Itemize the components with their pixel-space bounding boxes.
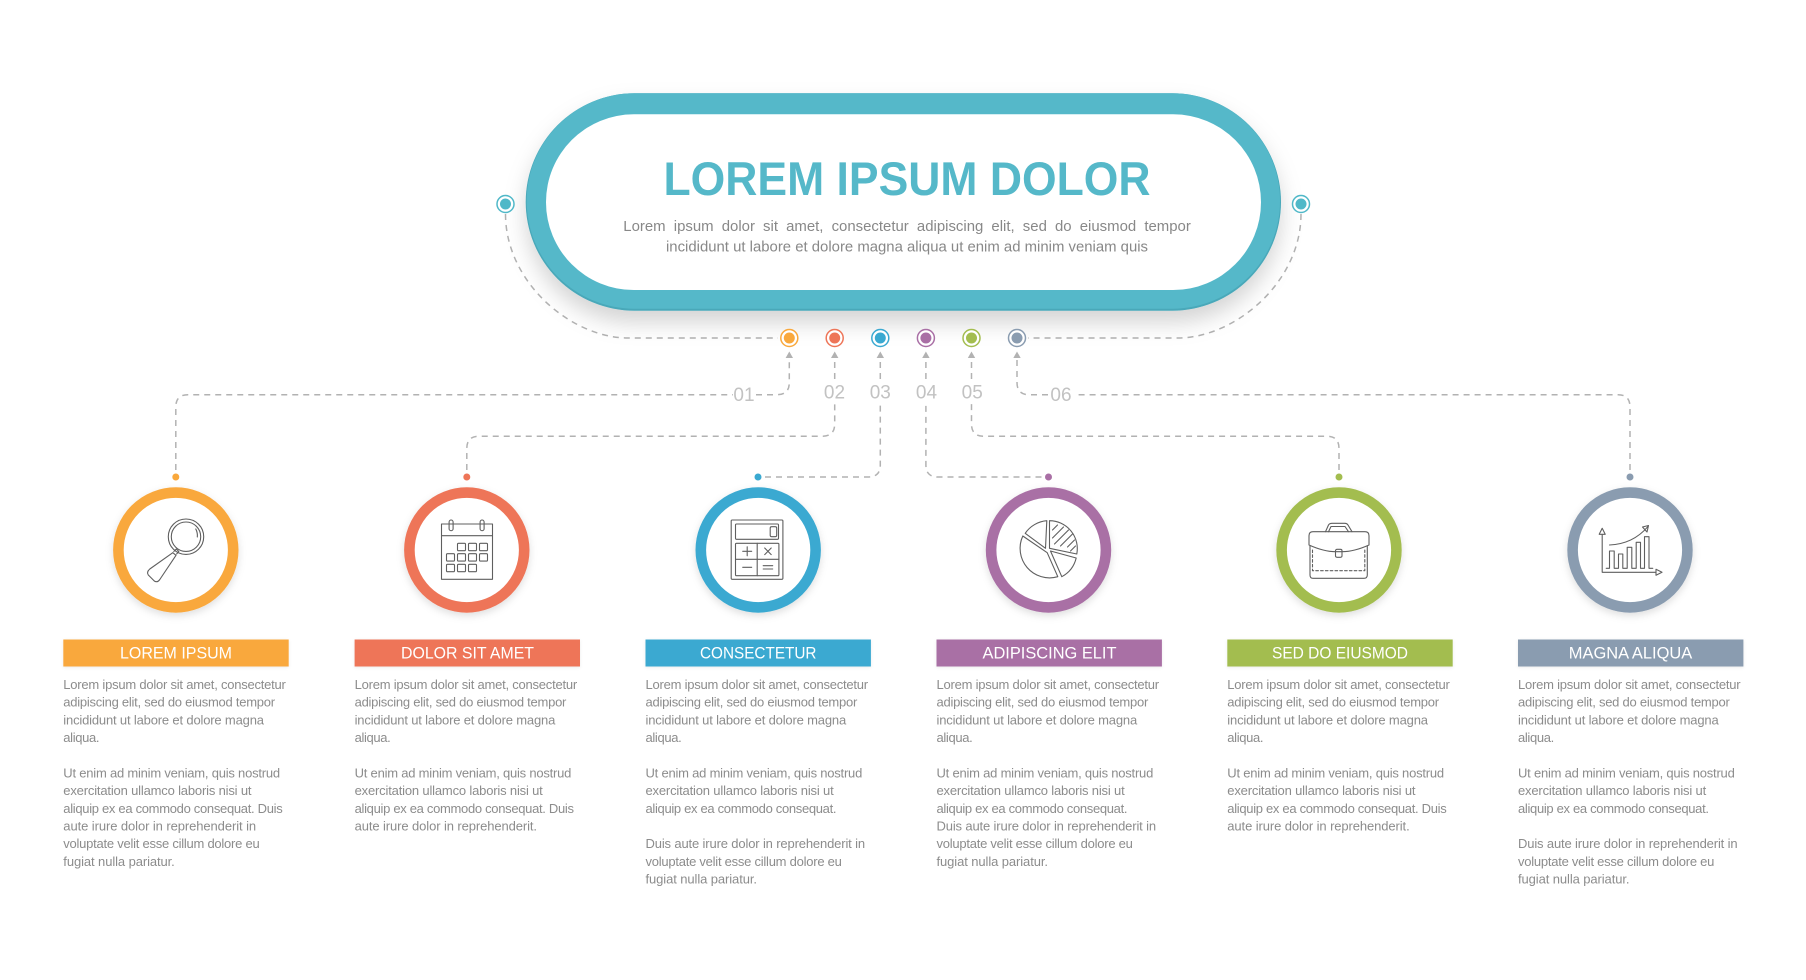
icon: calendar [442, 520, 492, 579]
number 02: 02 [824, 383, 845, 404]
body text 5: incididunt ut labore et dolore magna [1227, 712, 1429, 727]
header subtitle: Lorem ipsum dolor sit amet, consectetur adipiscing elit, sed do eiusmod tempor [623, 218, 1191, 235]
body text 1: fugiat nulla pariatur. [63, 854, 175, 869]
body text 2: aute irure dolor in reprehenderit. [355, 818, 537, 834]
number 06: 06 [1050, 385, 1072, 406]
panel: step 3 [646, 493, 871, 886]
body text 6: fugiat nulla pariatur. [1518, 871, 1630, 886]
body text 4: incididunt ut labore et dolore magna [936, 712, 1138, 727]
panel: step 6 [1518, 493, 1743, 886]
body text 1: Lorem ipsum dolor sit amet, consectetur [63, 677, 287, 692]
title bar 4: ADIPISCING ELIT [982, 644, 1116, 663]
body text 2: Lorem ipsum dolor sit amet, consectetur [355, 677, 578, 692]
body text 5: exercitation ullamco laboris nisi ut [1227, 783, 1416, 798]
body text 6: exercitation ullamco laboris nisi ut [1518, 783, 1707, 798]
body text 1: voluptate velit esse cillum dolore eu [63, 836, 260, 851]
number 05: 05 [962, 383, 983, 404]
body text 4: exercitation ullamco laboris nisi ut [936, 783, 1125, 798]
body text 5: aute irure dolor in reprehenderit. [1227, 818, 1410, 834]
body text 6: Lorem ipsum dolor sit amet, consectetur [1518, 677, 1741, 692]
header title: LOREM IPSUM DOLOR [664, 152, 1150, 205]
body text 1: aliqua. [63, 730, 100, 745]
body text 1: Ut enim ad minim veniam, quis nostrud [63, 766, 280, 780]
body text 3: voluptate velit esse cillum dolore eu [646, 854, 842, 869]
node dot 05 [963, 330, 980, 346]
title bar 3: CONSECTETUR [700, 644, 817, 663]
body text 3: Lorem ipsum dolor sit amet, consectetur [646, 677, 869, 692]
body text 2: aliquip ex ea commodo consequat. Duis [355, 801, 574, 816]
body text 3: aliqua. [646, 730, 682, 745]
connector 06 [1013, 352, 1634, 480]
body text 5: adipiscing elit, sed do eiusmod tempor [1227, 695, 1440, 710]
title bar 5 [1227, 640, 1453, 666]
body text 2: aliqua. [355, 730, 391, 745]
header left dot [497, 196, 514, 212]
title bar 4 [936, 640, 1162, 666]
panel: step 2 [355, 493, 580, 834]
body text 4: voluptate velit esse cillum dolore eu [936, 836, 1133, 851]
body text 3: Duis aute irure dolor in reprehenderit in [646, 836, 865, 851]
node dot 01 [781, 330, 798, 346]
icon: briefcase [1309, 523, 1369, 578]
icon: pie chart [1020, 521, 1077, 578]
body text 6: aliquip ex ea commodo consequat. [1518, 801, 1709, 816]
connector 05 [962, 352, 1342, 480]
ring 6 [1573, 493, 1687, 607]
icon: growth chart [1599, 526, 1662, 575]
connector 02 [463, 352, 845, 480]
body text 6: adipiscing elit, sed do eiusmod tempor [1518, 695, 1730, 710]
connector 04 [916, 352, 1052, 480]
ring 2 [409, 493, 524, 607]
body text 5: Lorem ipsum dolor sit amet, consectetur [1227, 677, 1451, 692]
body text 1: aliquip ex ea commodo consequat. Duis [63, 801, 283, 816]
title bar 1 [63, 640, 289, 666]
title bar 1: LOREM IPSUM [120, 644, 232, 663]
body text 1: incididunt ut labore et dolore magna [63, 712, 265, 727]
node dot 03 [872, 330, 889, 346]
body text 5: Ut enim ad minim veniam, quis nostrud [1227, 766, 1444, 780]
connector 03 [754, 352, 891, 480]
body text 6: aliqua. [1518, 730, 1554, 745]
connector: right arc from header to last dot [1028, 214, 1301, 338]
header pill [526, 93, 1281, 311]
title bar 2 [355, 640, 580, 666]
title bar 6: MAGNA ALIQUA [1569, 644, 1693, 663]
body text 5: aliquip ex ea commodo consequat. Duis [1227, 801, 1447, 816]
panel: step 1 [63, 493, 289, 869]
body text 4: aliqua. [936, 730, 973, 745]
number 04: 04 [916, 383, 937, 404]
body text 4: aliquip ex ea commodo consequat. [936, 801, 1128, 816]
body text 2: Ut enim ad minim veniam, quis nostrud [355, 766, 571, 780]
title bar 6 [1518, 640, 1743, 666]
node dot 04 [917, 330, 934, 346]
node dot 02 [826, 330, 843, 346]
body text 3: aliquip ex ea commodo consequat. [646, 801, 836, 816]
body text 4 [936, 677, 1160, 869]
body text 1: aute irure dolor in reprehenderit in [63, 818, 256, 834]
body text 2 [355, 677, 578, 834]
number 01: 01 [733, 385, 755, 406]
body text 1: exercitation ullamco laboris nisi ut [63, 783, 252, 798]
body text 4: Duis aute irure dolor in reprehenderit in [936, 818, 1156, 834]
body text 2: adipiscing elit, sed do eiusmod tempor [355, 695, 567, 710]
body text 4: Ut enim ad minim veniam, quis nostrud [936, 766, 1153, 780]
title bar 5: SED DO EIUSMOD [1272, 644, 1408, 663]
body text 5: aliqua. [1227, 730, 1264, 745]
body text 6: Ut enim ad minim veniam, quis nostrud [1518, 766, 1735, 780]
panel: step 4 [936, 493, 1162, 869]
body text 1: adipiscing elit, sed do eiusmod tempor [63, 695, 276, 710]
title bar 2: DOLOR SIT AMET [401, 644, 534, 663]
body text 6: Duis aute irure dolor in reprehenderit in [1518, 836, 1738, 851]
body text 6 [1518, 677, 1741, 886]
connector: left arc from header to first dot [506, 214, 778, 338]
node dot 06 [1008, 330, 1026, 346]
ring 4 [991, 493, 1106, 607]
header right dot [1292, 196, 1310, 212]
body text 6: voluptate velit esse cillum dolore eu [1518, 854, 1714, 869]
body text 6: incididunt ut labore et dolore magna [1518, 712, 1719, 727]
panel: step 5 [1227, 493, 1453, 834]
ring 1 [118, 493, 233, 607]
header subtitle: incididunt ut labore et dolore magna aliqua ut enim ad minim veniam quis [666, 239, 1148, 256]
body text 2: incididunt ut labore et dolore magna [355, 712, 556, 727]
body text 4: adipiscing elit, sed do eiusmod tempor [936, 695, 1149, 710]
body text 4: fugiat nulla pariatur. [936, 854, 1048, 869]
body text 3 [646, 677, 869, 886]
body text 2: exercitation ullamco laboris nisi ut [355, 783, 543, 798]
connector 01 [172, 352, 793, 480]
body text 5 [1227, 677, 1451, 834]
body text 3: adipiscing elit, sed do eiusmod tempor [646, 695, 858, 710]
title bar 3 [646, 640, 871, 666]
header subtitle [623, 218, 1191, 256]
icon: calculator [731, 520, 783, 579]
body text 3: exercitation ullamco laboris nisi ut [646, 783, 834, 798]
icon: magnifier [148, 519, 204, 582]
body text 3: incididunt ut labore et dolore magna [646, 712, 847, 727]
body text 3: Ut enim ad minim veniam, quis nostrud [646, 766, 862, 780]
body text 4: Lorem ipsum dolor sit amet, consectetur [936, 677, 1160, 692]
body text 3: fugiat nulla pariatur. [646, 871, 757, 886]
ring 3 [701, 493, 816, 607]
ring 5 [1282, 493, 1396, 607]
body text 1 [63, 677, 287, 869]
number 03: 03 [870, 383, 891, 404]
